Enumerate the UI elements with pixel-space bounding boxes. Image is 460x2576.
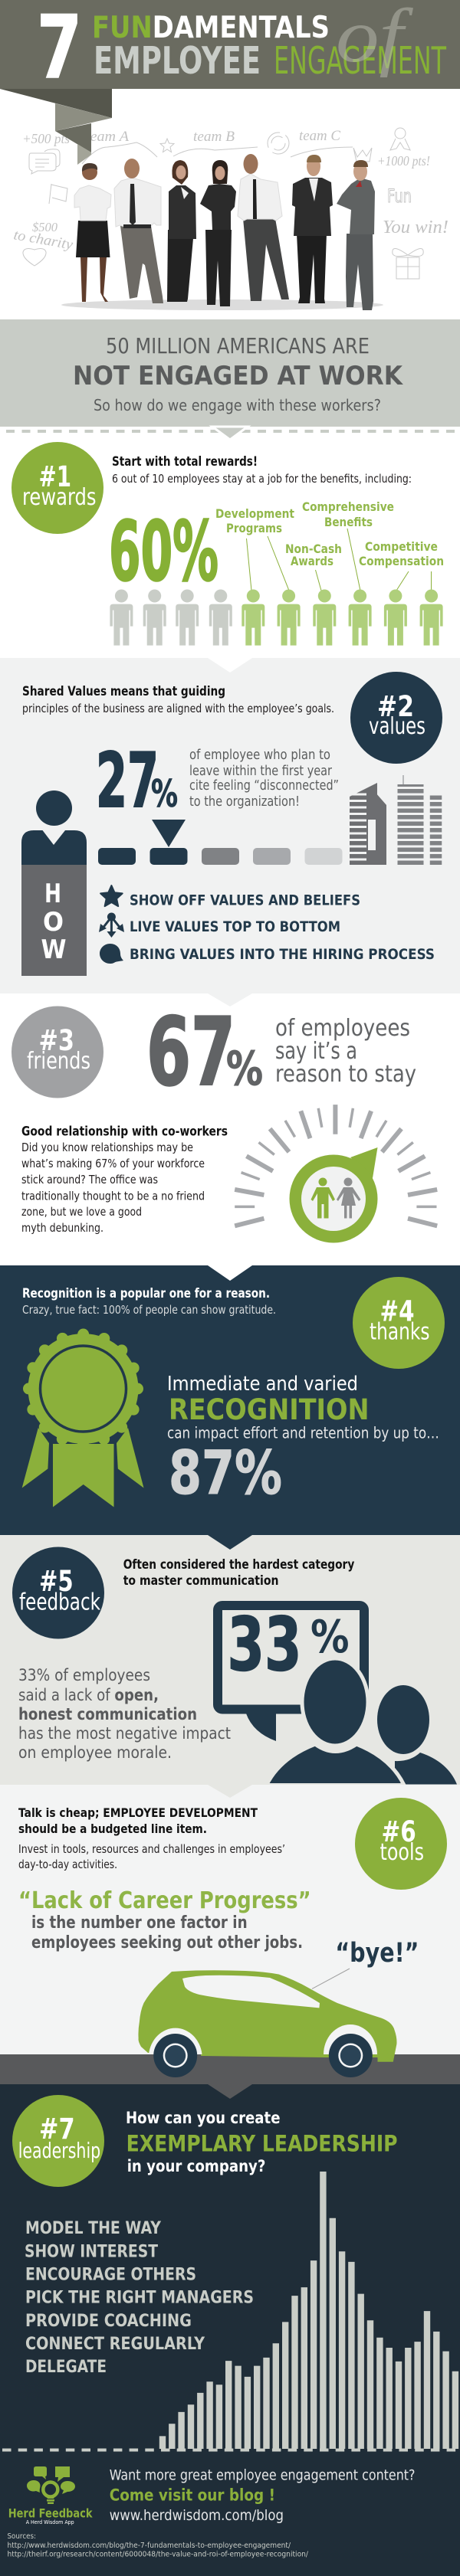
- feedback statement: honest communication: [18, 1705, 197, 1723]
- values heading: Shared Values means that guiding: [22, 684, 225, 699]
- intro line 2: NOT ENGAGED AT WORK: [73, 361, 404, 391]
- arrow: [208, 1265, 252, 1281]
- career statement: [31, 1913, 303, 1952]
- panel: intro band: [0, 319, 460, 427]
- bar chart: [2, 2172, 460, 2450]
- doodles: to charity: [12, 227, 74, 254]
- 27 percent: 27: [96, 738, 159, 825]
- feedback heading: [123, 1557, 354, 1588]
- feedback statement: has the most negative impact: [18, 1724, 231, 1743]
- 87 percent: 87%: [169, 1439, 282, 1508]
- progress bars: [98, 848, 342, 865]
- arrow: [212, 427, 248, 440]
- benefit labels: Development: [215, 506, 294, 521]
- icon: friends pin: [290, 1147, 377, 1242]
- marker triangle: [152, 820, 186, 847]
- arrow: [208, 1785, 252, 1798]
- blog url: www.herdwisdom.com/blog: [110, 2507, 284, 2524]
- badge #6: [355, 1798, 447, 1890]
- arrow: [208, 2084, 252, 2099]
- friends heading: Good relationship with co-workers: [21, 1124, 228, 1138]
- arrow: [208, 658, 252, 673]
- logo: herd feedback: [8, 2466, 93, 2525]
- badge #4: #4: [380, 1295, 414, 1328]
- ribbon banner: [0, 89, 112, 165]
- sunburst ticks: [235, 1105, 437, 1226]
- 67 percent: %: [226, 1042, 263, 1096]
- doodles: +1000 pts!: [377, 153, 430, 169]
- panel: feedback: [0, 1535, 460, 1785]
- 67 percent description: say it’s a: [275, 1038, 357, 1065]
- how item 2: LIVE VALUES TOP TO BOTTOM: [130, 918, 340, 935]
- feedback heading: Often considered the hardest category: [123, 1557, 354, 1572]
- icon: two people: [267, 1658, 457, 1785]
- badge #7: #7: [39, 2113, 75, 2146]
- leadership list: PROVIDE COACHING: [25, 2312, 192, 2331]
- thanks subtext: Crazy, true fact: 100% of people can show gratitude.: [22, 1303, 276, 1317]
- benefit labels: [215, 499, 444, 568]
- thanks heading: Recognition is a popular one for a reason.: [22, 1286, 270, 1301]
- 27 percent description: of employee who plan to: [189, 748, 330, 763]
- 67 percent: 67: [146, 998, 235, 1107]
- benefit labels: Benefits: [324, 515, 373, 529]
- 27 percent: %: [151, 772, 178, 816]
- person 6: [292, 155, 333, 303]
- people icon row: [110, 590, 443, 646]
- badge #1: #1: [38, 460, 71, 493]
- icon: buildings: [350, 775, 435, 865]
- badge #5: [12, 1547, 104, 1639]
- panel: friends: [0, 993, 460, 1265]
- sources: Sources:: [8, 2532, 36, 2541]
- 27 percent description: to the organization!: [189, 794, 300, 810]
- feedback statement: on employee morale.: [18, 1743, 172, 1762]
- friends body: stick around? The office was: [21, 1173, 158, 1187]
- leadership list: ENCOURAGE OTHERS: [25, 2265, 196, 2284]
- friends body: zone, but we love a good: [21, 1205, 142, 1219]
- leadership question line 3: in your company?: [127, 2157, 265, 2175]
- how item 2: [99, 913, 340, 938]
- badge #2: #2: [377, 690, 414, 723]
- 67 percent description: [275, 1015, 416, 1088]
- benefit labels: Comprehensive: [302, 499, 394, 514]
- icon: car: [138, 1970, 396, 2077]
- badge #3: #3: [38, 1024, 74, 1057]
- how box: H: [44, 879, 61, 909]
- person 2: [114, 159, 163, 303]
- doodles: $500: [32, 220, 58, 234]
- person 1: [74, 163, 111, 302]
- icon: front wheel: [153, 2034, 197, 2077]
- feedback statement: 33% of employees: [18, 1666, 150, 1684]
- arrow: [208, 1535, 252, 1550]
- panel: tools: [0, 1785, 460, 2084]
- icon: woman: [337, 1178, 360, 1218]
- feedback heading: to master communication: [123, 1573, 279, 1588]
- doodles: [12, 128, 449, 279]
- road: [0, 2054, 460, 2084]
- tools heading: Talk is cheap; EMPLOYEE DEVELOPMENT: [18, 1805, 258, 1820]
- floor shadow: [61, 299, 383, 310]
- sources: http://theirf.org/research/content/6000048/the-value-and-roi-of-employee-recognition/: [8, 2551, 309, 2558]
- friends body: [21, 1141, 205, 1235]
- doodles: Fun: [387, 185, 412, 207]
- badge #3: friends: [27, 1048, 90, 1075]
- intro line 3: So how do we engage with these workers?: [94, 396, 381, 414]
- badge #2: values: [369, 713, 426, 740]
- badge #5: #5: [39, 1565, 74, 1598]
- doodles: You win!: [383, 218, 449, 237]
- friends body: what’s making 67% of your workforce: [21, 1157, 205, 1170]
- doodles: +500 pts: [22, 131, 70, 146]
- person 5: [238, 154, 289, 301]
- badge #4: thanks: [370, 1319, 429, 1345]
- leadership list: [25, 2219, 254, 2377]
- career quote: “Lack of Career Progress”: [18, 1887, 311, 1914]
- 33 percent: %: [310, 1610, 350, 1663]
- doodles: team A: [86, 129, 129, 145]
- benefit labels: Awards: [291, 554, 334, 568]
- leadership list: MODEL THE WAY: [25, 2219, 162, 2238]
- icon: employee figure: [21, 790, 87, 865]
- person 4: [200, 160, 236, 306]
- 67 percent description: of employees: [275, 1015, 410, 1042]
- badge #6: #6: [382, 1815, 416, 1848]
- intro line 1: 50 MILLION AMERICANS ARE: [106, 334, 370, 358]
- doodles: team B: [193, 129, 235, 145]
- tools heading: [18, 1805, 258, 1836]
- title: fundamentals: FUNDAMENTALS: [92, 11, 330, 45]
- logo: herd feedback: Herd Feedback: [8, 2506, 93, 2520]
- badge #1: rewards: [22, 484, 97, 511]
- title: employee: EMPLOYEE: [94, 39, 261, 83]
- call to action 1: Want more great employee engagement content?: [110, 2468, 415, 2483]
- sources: [8, 2532, 309, 2558]
- tools body: [18, 1842, 285, 1871]
- leadership question line 1: How can you create: [126, 2109, 281, 2127]
- friends body: Did you know relationships may be: [21, 1141, 193, 1154]
- badge #3: [12, 1007, 104, 1098]
- badge #6: tools: [380, 1839, 424, 1866]
- leadership list: PICK THE RIGHT MANAGERS: [25, 2288, 254, 2307]
- panel: values: [0, 658, 460, 993]
- logo: herd feedback: A Herd Wisdom App: [26, 2519, 74, 2525]
- badge #2: [350, 672, 442, 764]
- badge #1: [12, 442, 104, 534]
- benefit labels: Non-Cash: [285, 542, 342, 556]
- 60 percent: 60%: [109, 505, 219, 600]
- icon: monitor: [218, 1605, 364, 1741]
- benefit labels: Programs: [226, 521, 282, 535]
- panel: thanks: [0, 1265, 460, 1535]
- rewards heading: Start with total rewards!: [112, 454, 258, 469]
- 27 percent description: cite feeling “disconnected”: [189, 778, 339, 794]
- values subtext: principles of the business are aligned with the employee’s goals.: [22, 702, 334, 715]
- sources: http://www.herdwisdom.com/blog/the-7-fundamentals-to-employee-engagement/: [8, 2542, 291, 2550]
- recognition text 1: Immediate and varied: [167, 1373, 358, 1396]
- callout line: [312, 1969, 350, 1988]
- 27 percent description: [189, 748, 339, 810]
- leadership question line 2: EXEMPLARY LEADERSHIP: [127, 2131, 398, 2157]
- arrow: [208, 993, 252, 1007]
- icon: bulb and bubbles: [27, 2466, 75, 2504]
- career statement: is the number one factor in: [31, 1913, 248, 1933]
- icon: man: [311, 1178, 335, 1218]
- how item 1: [100, 885, 360, 908]
- how box: [21, 865, 87, 976]
- badge #4: [353, 1277, 445, 1369]
- badge #7: [12, 2095, 104, 2187]
- recognition word: RECOGNITION: [169, 1393, 370, 1426]
- friends body: traditionally thought to be a no friend: [21, 1189, 205, 1203]
- panel: team hero: [0, 89, 460, 319]
- 33 percent: 33: [227, 1602, 302, 1687]
- icon: rear wheel: [329, 2034, 373, 2077]
- panel: leadership: [0, 2084, 460, 2576]
- friends body: myth debunking.: [21, 1221, 104, 1235]
- tools heading: should be a budgeted line item.: [18, 1822, 207, 1836]
- how box: O: [43, 907, 64, 938]
- career statement: employees seeking out other jobs.: [31, 1933, 303, 1952]
- tools body: Invest in tools, resources and challenges in employees’: [18, 1842, 285, 1856]
- benefit labels: Compensation: [359, 554, 444, 568]
- bye quote: “bye!”: [335, 1938, 419, 1969]
- tools body: day-to-day activities.: [18, 1858, 117, 1871]
- how item 1: SHOW OFF VALUES AND BELIEFS: [130, 892, 360, 908]
- badge #7: leadership: [18, 2138, 100, 2163]
- person 7: [337, 160, 375, 310]
- leadership list: DELEGATE: [25, 2358, 107, 2377]
- person 3: [167, 160, 196, 302]
- feedback statement: said a lack of open,: [18, 1686, 159, 1704]
- leader lines: [247, 529, 431, 591]
- leadership list: SHOW INTEREST: [25, 2242, 158, 2261]
- 67 percent description: reason to stay: [275, 1061, 416, 1088]
- badge #5: feedback: [19, 1589, 100, 1615]
- benefit labels: Competitive: [365, 539, 438, 554]
- call to action 2: Come visit our blog !: [110, 2486, 275, 2505]
- leadership list: CONNECT REGULARLY: [25, 2335, 205, 2354]
- icon: ribbon award: [22, 1334, 144, 1507]
- 27 percent description: leave within the first year: [189, 764, 333, 779]
- panel: rewards: [0, 427, 460, 658]
- panel: header: [0, 0, 460, 98]
- doodles: team C: [299, 128, 340, 144]
- how box: W: [41, 934, 66, 965]
- feedback statement: [18, 1666, 231, 1762]
